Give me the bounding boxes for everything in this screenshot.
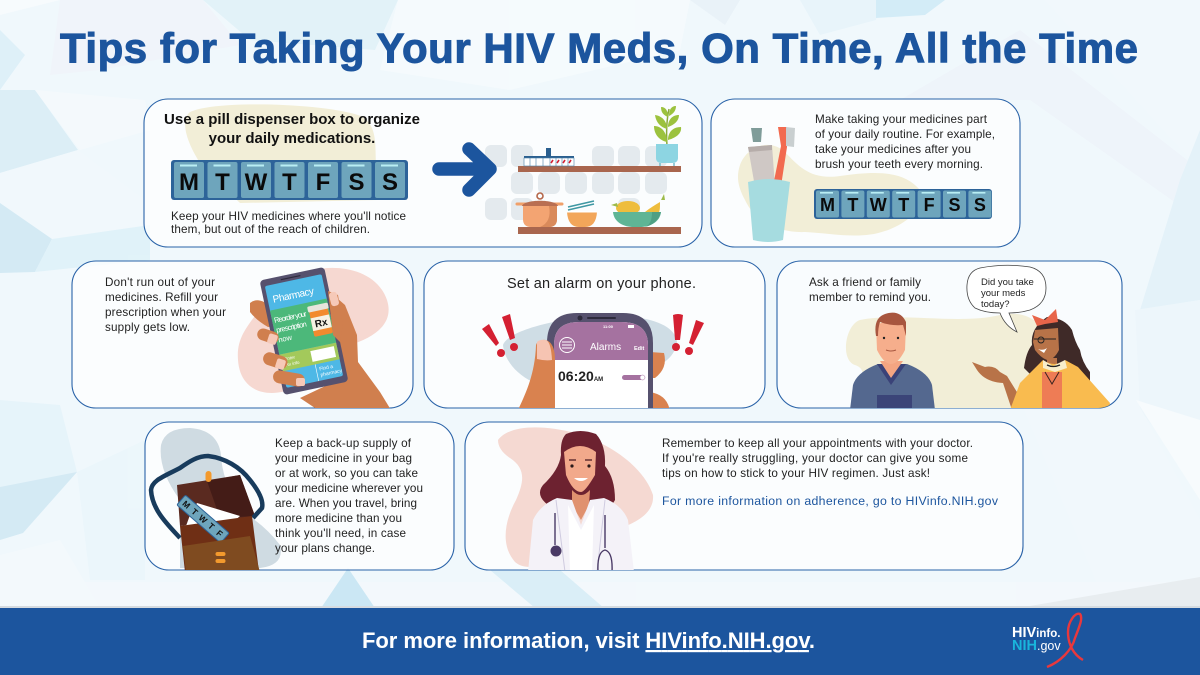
text: tips on how to stick to your HIV regimen. Just ask! <box>662 467 930 480</box>
logo: HIVinfo. <box>1012 625 1060 641</box>
plant <box>654 106 681 166</box>
pill box MTWTFSS <box>814 189 992 219</box>
strap <box>151 456 262 538</box>
text: your medicine in your bag <box>275 452 412 465</box>
pill box MTWTFSS: W <box>870 195 887 215</box>
stacked bowl <box>567 201 597 227</box>
text: member to remind you. <box>809 291 931 304</box>
speech bubble <box>967 265 1046 332</box>
wall tiles <box>485 145 667 220</box>
bubble text <box>981 277 1034 310</box>
pill box MTWTFSS: S <box>348 169 365 196</box>
toothbrush <box>773 127 795 186</box>
heading <box>164 111 420 147</box>
mini pill strip: T <box>189 506 201 518</box>
link text: For more information on adherence, go to HIVinfo.NIH.gov <box>662 494 999 508</box>
orange tab <box>206 471 212 482</box>
toggle <box>622 375 645 380</box>
pill box MTWTFSS: W <box>245 169 268 196</box>
text: of your daily routine. For example, <box>815 128 995 141</box>
hand behind phone <box>250 292 391 410</box>
bag pocket <box>183 536 260 572</box>
phone: now <box>277 333 293 344</box>
pill box MTWTFSS: T <box>898 195 909 215</box>
shelves <box>518 166 681 234</box>
pill box MTWTFSS: F <box>924 195 935 215</box>
caption: them, but out of the reach of children. <box>171 223 370 236</box>
text: medicines. Refill your <box>105 291 218 304</box>
text: your plans change. <box>275 542 375 555</box>
phone <box>260 267 348 395</box>
phone: Rx info <box>285 360 300 367</box>
text <box>275 437 423 555</box>
text: If you're really struggling, your doctor can give you some <box>662 452 968 465</box>
phone: Pharmacy <box>272 286 315 306</box>
pill box MTWTFSS: F <box>316 169 330 196</box>
cooking pot <box>517 193 562 227</box>
phone: Reorder your <box>273 309 308 325</box>
logo: NIH.gov <box>1012 638 1061 654</box>
phone: prescription <box>275 319 307 335</box>
pink blob <box>498 427 653 567</box>
text <box>815 113 995 171</box>
doctor <box>528 431 634 572</box>
text: take your medicines after you <box>815 143 971 156</box>
text: brush your teeth every morning. <box>815 158 983 171</box>
title: Tips for Taking Your HIV Meds, On Time, All the Time <box>60 24 1138 72</box>
panel: back-up supply <box>145 422 454 572</box>
pill box MTWTFSS: T <box>282 169 297 196</box>
phone: Enter <box>284 354 296 362</box>
beige blob <box>738 145 922 236</box>
phone: Alarms <box>590 342 621 353</box>
pill box MTWTFSS: M <box>179 169 199 196</box>
text: Keep a back-up supply of <box>275 437 412 450</box>
mini pill strip <box>177 495 229 543</box>
phone: Find a <box>319 364 334 373</box>
bag back and paper <box>177 475 255 526</box>
phone: 11:00 <box>603 324 614 329</box>
mini pill strip: M <box>180 498 192 511</box>
text: Ask a friend or family <box>809 276 921 289</box>
pill box MTWTFSS: S <box>974 195 986 215</box>
bubble text: Did you take <box>981 277 1034 288</box>
pink blob <box>238 268 389 393</box>
footer band <box>0 608 1200 675</box>
hamburger icon <box>560 338 574 352</box>
panel: doctor <box>465 422 1023 572</box>
text: supply gets low. <box>105 321 190 334</box>
exclamation marks left <box>482 314 518 357</box>
thumb <box>519 340 555 408</box>
mini pill strip: F <box>214 528 225 539</box>
text: or at work, so you can take <box>275 467 418 480</box>
exclamation marks right <box>672 314 704 355</box>
text: Make taking your medicines part <box>815 113 988 126</box>
back hand fingers <box>653 352 670 408</box>
pill box MTWTFSS: M <box>820 195 835 215</box>
pill box MTWTFSS <box>171 160 408 200</box>
arrow <box>439 149 490 190</box>
text <box>809 276 931 304</box>
mini pill strip: W <box>197 513 210 526</box>
panel: friend <box>777 261 1122 412</box>
heading: your daily medications. <box>209 130 375 147</box>
text: think you'll need, in case <box>275 527 406 540</box>
fingers over phone <box>256 291 343 388</box>
caption <box>171 210 406 236</box>
panel: alarm <box>424 261 765 412</box>
cup <box>748 179 790 242</box>
text: are. When you travel, bring <box>275 497 417 510</box>
text: your medicine wherever you <box>275 482 423 495</box>
phone: pharmacy <box>320 368 343 378</box>
caption: Keep your HIV medicines where you'll notice <box>171 210 406 223</box>
small pill box <box>524 148 574 166</box>
phone: Edit <box>634 346 645 352</box>
bubble text: today? <box>981 299 1010 310</box>
pill box MTWTFSS: T <box>847 195 858 215</box>
toothpaste <box>748 128 775 187</box>
panel: daily routine <box>711 99 1020 247</box>
pill box MTWTFSS: T <box>215 169 230 196</box>
phone <box>547 313 653 412</box>
text: Remember to keep all your appointments with your doctor. <box>662 437 973 450</box>
phone: Rx <box>314 317 329 330</box>
text <box>105 276 226 334</box>
pill box MTWTFSS: S <box>382 169 398 196</box>
beige blob <box>846 314 1037 408</box>
bubble text: your meds <box>981 288 1026 299</box>
bag front <box>180 516 259 572</box>
grey blob <box>161 428 281 568</box>
text: Don't run out of your <box>105 276 215 289</box>
panel: refill <box>72 261 413 410</box>
text: more medicine than you <box>275 512 402 525</box>
footer text: For more information, visit HIVinfo.NIH.gov. <box>362 628 815 653</box>
man <box>850 313 935 410</box>
mini pill strip: T <box>206 521 217 532</box>
woman <box>972 309 1110 410</box>
text <box>662 437 973 480</box>
text: prescription when your <box>105 306 226 319</box>
pill box MTWTFSS: S <box>948 195 961 215</box>
blob <box>503 318 677 380</box>
fruit bowl <box>611 194 665 227</box>
alarm text: Set an alarm on your phone. <box>507 276 696 292</box>
logo <box>1012 614 1083 667</box>
beige blob <box>185 104 378 203</box>
heading: Use a pill dispenser box to organize <box>164 111 420 128</box>
panel: pill dispenser <box>144 99 702 247</box>
phone: 06:20AM <box>558 368 603 384</box>
